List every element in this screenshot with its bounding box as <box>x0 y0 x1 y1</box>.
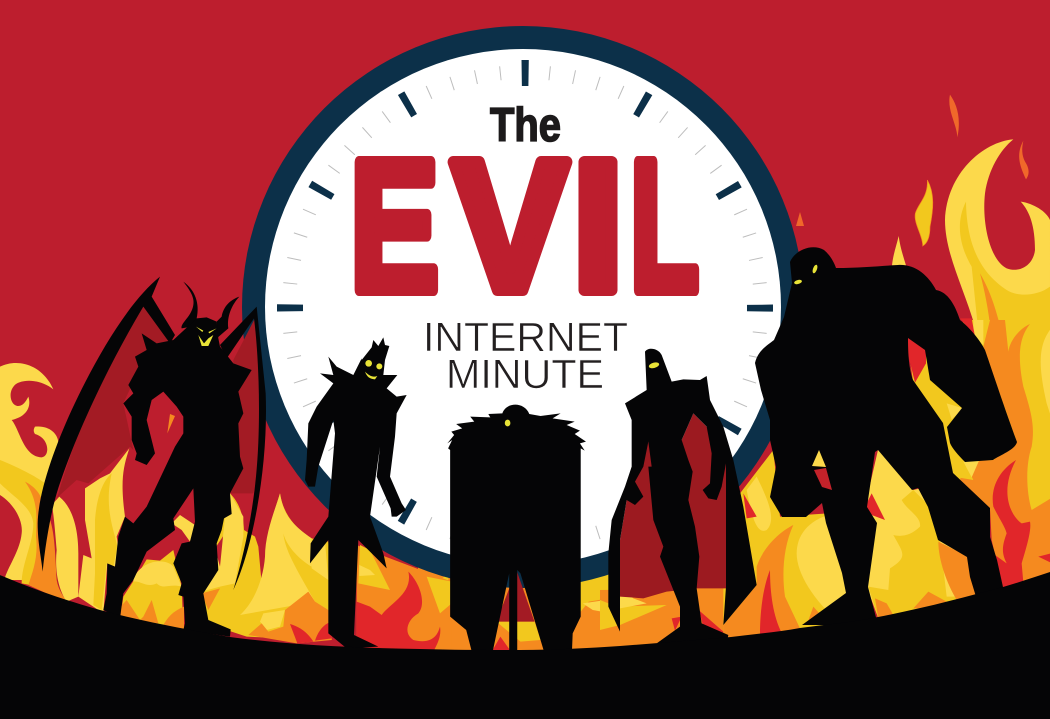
brute arm gap red <box>814 468 832 490</box>
demon wing membranes <box>57 307 173 497</box>
demon horns <box>182 282 239 338</box>
villain: hooded caped figure <box>608 349 757 643</box>
villain: winged demon <box>38 277 266 637</box>
demon body <box>103 317 252 637</box>
black ground <box>0 572 1050 719</box>
title word: EVIL: E <box>350 123 439 330</box>
title word: EVIL: V <box>452 123 568 330</box>
minute ticks <box>289 72 761 544</box>
title word: EVIL: L <box>630 123 699 330</box>
brute eye, left <box>794 279 802 285</box>
subtitle line: INTERNET: INTERNET <box>423 314 628 360</box>
cloak silhouette <box>447 405 586 653</box>
brute eye, right <box>812 264 818 274</box>
demon right wing <box>220 307 266 590</box>
hood eye <box>648 361 660 369</box>
demon face <box>196 327 217 346</box>
hour ticks <box>290 73 760 543</box>
demon small flame <box>167 414 175 433</box>
flames: right, in front of the clock <box>600 95 1050 645</box>
clock face <box>265 49 781 565</box>
title word: The: The <box>490 98 561 151</box>
title word: EVIL: I <box>572 123 624 330</box>
cloaked figure eye <box>505 420 510 426</box>
demon left wing <box>38 277 175 572</box>
tiny ember by the clock <box>796 212 804 226</box>
clock ring <box>242 26 804 588</box>
villain: fur-collared cloaked figure <box>447 405 586 653</box>
cape lining <box>620 413 726 598</box>
reaper eyes and smile <box>365 360 382 379</box>
villain: spiky-haired reaper <box>305 337 407 648</box>
cloak inner lining <box>496 570 535 622</box>
villain: hulking brute <box>755 247 1017 625</box>
flames: left and behind the clock <box>0 363 782 653</box>
clock <box>242 26 804 588</box>
caped figure silhouette <box>608 349 757 643</box>
subtitle line: MINUTE: MINUTE <box>446 351 604 397</box>
brute arm gap flame <box>812 450 826 467</box>
title <box>350 98 699 397</box>
